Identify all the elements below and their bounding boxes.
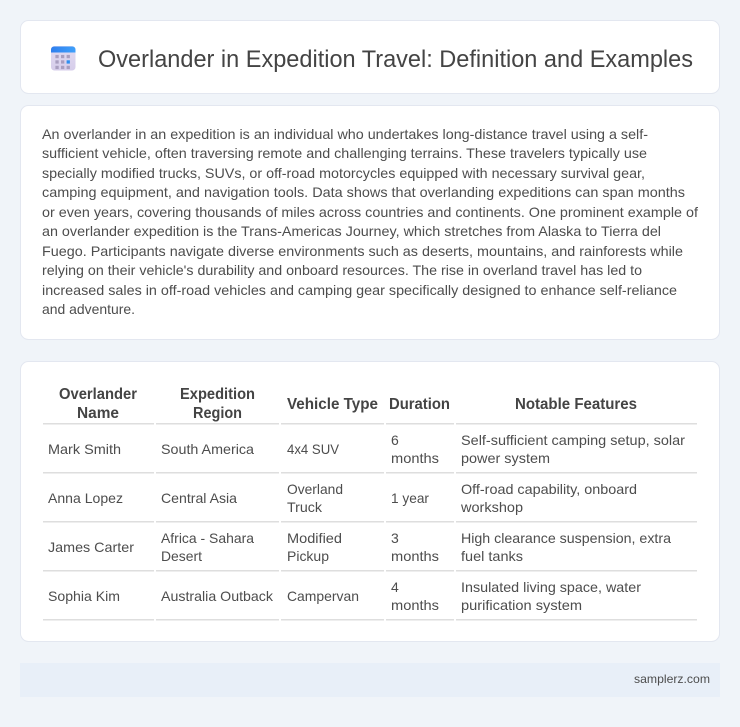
text block: description paragraph: An overlander in an expedition is an individual who undertakes long-distance travel using a self- [42, 126, 648, 142]
text block: description paragraph: Fuego. Participants navigate diverse environments such as deserts, mountains, and rainforests while [42, 243, 683, 259]
text block: description paragraph [42, 126, 698, 317]
text block: description paragraph: sufficient vehicle, often traversing remote and challenging terrains. These travelers typically use [42, 145, 647, 161]
table row: James Carter [48, 530, 671, 564]
panel: overlander table [20, 362, 720, 642]
text block: description paragraph: or even years, covering thousands of miles across countries and continents. One prominent example of [42, 204, 698, 220]
text block: description paragraph: an overlander expedition is the Trans-Americas Journey, which stretches from Alaska to Tierra del [42, 223, 661, 239]
table row: Mark Smith: South America [161, 441, 254, 457]
table header row: Duration [389, 396, 450, 413]
table header row: Notable Features [515, 396, 637, 413]
table row: Mark Smith: 6 [391, 432, 399, 448]
table row: Mark Smith: Mark Smith [48, 441, 121, 457]
table row: Sophia Kim [48, 579, 641, 613]
table row: Sophia Kim: months [391, 597, 439, 613]
table row: Sophia Kim: purification system [461, 597, 582, 613]
footer source text: samplerz.com [634, 672, 710, 686]
table row: Sophia Kim: Campervan [287, 588, 359, 604]
text block: description paragraph: specially modified trucks, SUVs, or off-road motorcycles equipped with necessary survival gear, [42, 165, 645, 181]
table header row: Vehicle Type [287, 396, 378, 413]
table row: Anna Lopez: Overland [287, 481, 343, 497]
table row: Mark Smith: Self-sufficient camping setup, solar [461, 432, 685, 448]
text block: description paragraph: relying on their vehicle's durability and onboard resources. The rise in overland travel has led to [42, 262, 642, 278]
table row: Anna Lopez [48, 481, 637, 515]
table row: James Carter: 3 [391, 530, 399, 546]
icon: calendar [51, 46, 76, 70]
table row: Anna Lopez: workshop [460, 499, 523, 515]
table row: Sophia Kim: Australia Outback [161, 588, 274, 604]
table row: Mark Smith [48, 432, 685, 466]
table row: Mark Smith: power system [461, 450, 550, 466]
text block: description paragraph: and adventure. [42, 301, 135, 317]
table header row: Overlander [59, 386, 137, 403]
table row: Anna Lopez: Central Asia [161, 490, 237, 506]
table row: Anna Lopez: Anna Lopez [48, 490, 123, 506]
table row: James Carter: fuel tanks [461, 548, 523, 564]
table row: Anna Lopez: Truck [287, 499, 323, 515]
table row: Anna Lopez: Off-road capability, onboard [461, 481, 637, 497]
table row: James Carter: Africa - Sahara [161, 530, 254, 546]
table row: Sophia Kim: Insulated living space, water [461, 579, 641, 595]
table row: Mark Smith: 4x4 SUV [287, 441, 340, 457]
title: Overlander in Expedition Travel: Definition and Examples [98, 46, 693, 73]
table row: Sophia Kim: 4 [391, 579, 399, 595]
table row: Mark Smith: months [391, 450, 439, 466]
panel: title header [20, 20, 720, 94]
table header row [59, 386, 637, 422]
table row: James Carter: Modified [287, 530, 342, 546]
panel: description [20, 106, 720, 340]
table row: Sophia Kim: Sophia Kim [48, 588, 120, 604]
text block: description paragraph: increased sales in off-road vehicles and camping gear specifically designed to enhance self-reliance [42, 282, 677, 298]
text block: description paragraph: camping equipment, and navigation tools. Data shows that overlanding expeditions can span months [42, 184, 685, 200]
table row: James Carter: High clearance suspension, extra [461, 530, 671, 546]
table header row: Region [193, 405, 242, 422]
table row: James Carter: James Carter [48, 539, 134, 555]
footer bar [20, 663, 720, 697]
table row: Anna Lopez: 1 year [391, 490, 429, 506]
table header row: Expedition [180, 386, 255, 403]
table row: James Carter: months [391, 548, 439, 564]
table header row: Name [77, 405, 119, 422]
table row: James Carter: Desert [161, 548, 202, 564]
table row: James Carter: Pickup [287, 548, 329, 564]
